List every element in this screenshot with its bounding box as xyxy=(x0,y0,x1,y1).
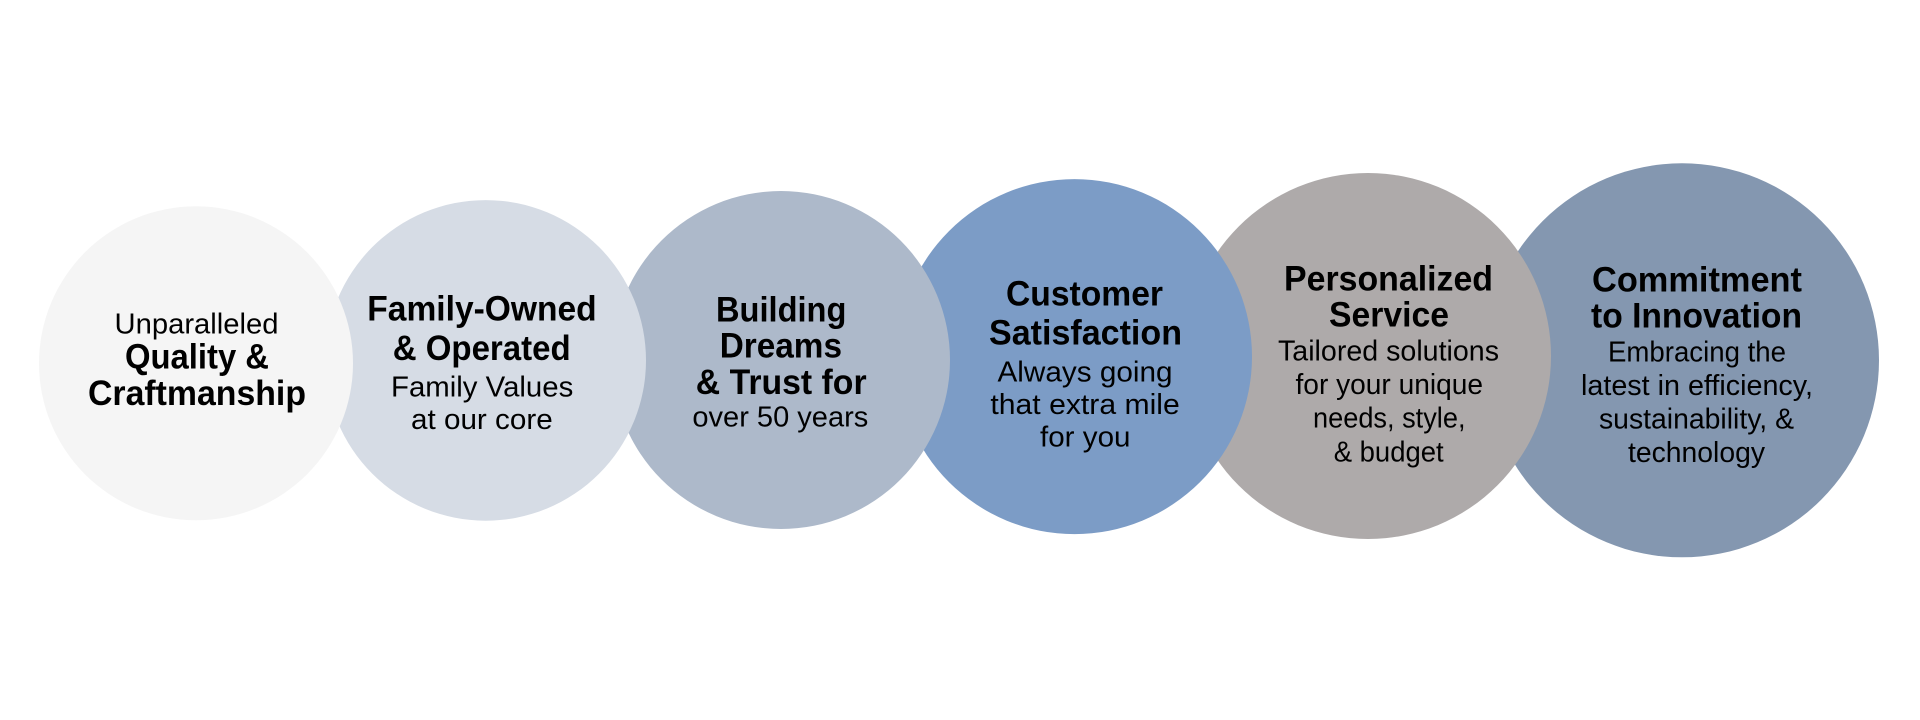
text: commitment to innovation: Embracing the xyxy=(1608,336,1786,368)
text: commitment to innovation: sustainability, & xyxy=(1599,403,1794,435)
text: building dreams and trust: over 50 years xyxy=(692,402,868,434)
circle: building dreams and trust xyxy=(612,191,950,529)
panel: customer satisfaction xyxy=(897,179,1252,534)
text: quality and craftsmanship xyxy=(88,308,306,413)
text: customer satisfaction: that extra mile xyxy=(990,389,1180,421)
text: personalized service xyxy=(1278,260,1499,468)
text: family-owned and operated xyxy=(367,289,597,436)
text: commitment to innovation: Commitment xyxy=(1592,260,1802,299)
text: personalized service: for your unique xyxy=(1296,369,1483,401)
panel: quality and craftsmanship xyxy=(39,206,353,520)
text: building dreams and trust: & Trust for xyxy=(696,363,867,402)
text: customer satisfaction: Satisfaction xyxy=(989,314,1182,353)
text: building dreams and trust: Dreams xyxy=(720,326,842,365)
panel: family-owned and operated xyxy=(325,200,646,521)
text: quality and craftsmanship: Craftmanship xyxy=(88,374,306,413)
text: commitment to innovation: to Innovation xyxy=(1591,296,1802,335)
text: personalized service: Service xyxy=(1329,296,1449,335)
circle: quality and craftsmanship xyxy=(39,206,353,520)
circle: customer satisfaction xyxy=(897,179,1252,534)
text: family-owned and operated: Family Values xyxy=(391,372,573,404)
text: personalized service: Tailored solutions xyxy=(1278,336,1499,368)
text: quality and craftsmanship: Quality & xyxy=(125,337,269,376)
text: building dreams and trust xyxy=(692,291,868,434)
panel: personalized service xyxy=(1185,173,1551,539)
text: family-owned and operated: & Operated xyxy=(393,329,571,368)
text: personalized service: needs, style, xyxy=(1313,403,1466,435)
panel: building dreams and trust xyxy=(612,191,950,529)
text: family-owned and operated: at our core xyxy=(411,404,553,436)
text: customer satisfaction: Customer xyxy=(1006,274,1163,313)
text: commitment to innovation xyxy=(1581,260,1813,469)
text: building dreams and trust: Building xyxy=(716,291,846,330)
text: family-owned and operated: Family-Owned xyxy=(367,289,597,328)
text: quality and craftsmanship: Unparalleled xyxy=(114,308,278,340)
circle: personalized service xyxy=(1185,173,1551,539)
text: customer satisfaction: for you xyxy=(1040,421,1130,453)
circle: family-owned and operated xyxy=(325,200,646,521)
text: customer satisfaction xyxy=(989,274,1182,453)
text: personalized service: & budget xyxy=(1334,436,1444,468)
text: customer satisfaction: Always going xyxy=(998,356,1172,388)
text: commitment to innovation: latest in efficiency, xyxy=(1581,370,1813,402)
text: personalized service: Personalized xyxy=(1284,260,1493,299)
panel: commitment to innovation xyxy=(1485,163,1879,557)
text: commitment to innovation: technology xyxy=(1628,437,1766,469)
circle: commitment to innovation xyxy=(1485,163,1879,557)
